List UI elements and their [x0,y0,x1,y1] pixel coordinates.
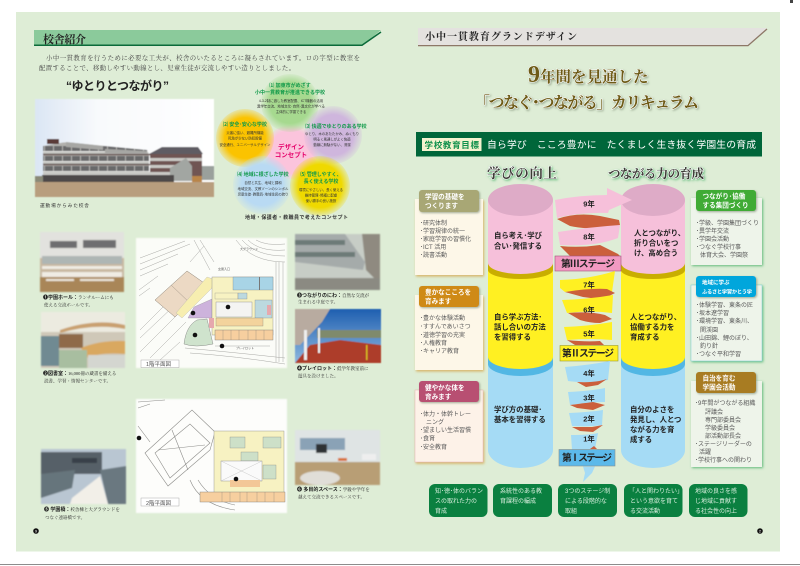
panel: 自治を育む学園会活動: 評議会 [705,408,723,416]
caption 2 [43,370,116,384]
right stage 1 goal: 自分のよさを [630,405,674,414]
6年 ribbon: 6年 [583,306,595,315]
panel: 自治を育む学園会活動: 専門部委員会 [705,416,741,424]
concept 1 text: 異学年交流、地域文化･自然･異文化が学べる [257,104,325,108]
stage 2 goal: 自ら学ぶ方法･ [494,312,542,322]
right stage 3 goal: け、高め合う [634,248,678,258]
caption 3: ❸つながりのにわ：自然な交流が [297,292,370,299]
stage 3 goal: 自ら考え･学び [494,231,542,240]
card: 知・徳・体のバランス: 知･徳･体のバラン [435,487,483,495]
panel: 学習の基礎をつくります: ･読書活動 [420,251,447,259]
panel: 地域に学ぶふるさと学習かとう学: ･体験学習、東条の匠 [696,301,753,309]
panel: 自治を育む学園会活動 [691,372,762,467]
concept 5 text: 環境にやさしい、長く使える [299,187,343,192]
page number left [33,528,39,534]
stage I box: 第Ⅰステージ [562,451,612,464]
panel: 地域に学ぶふるさと学習かとう学: ･環境学習、東条川、 [696,317,753,325]
9年 ribbon with arrow [555,188,632,229]
card: 3つのステージ制 [558,484,617,517]
floor plan: 2nd floor: 2階平面図 [146,499,172,507]
concept 4 text [237,171,289,196]
right stage 1 goal: ながる力を育 [630,425,674,434]
floor plan: 1st floor: 1階平面図 [146,360,172,368]
page number right [757,528,763,534]
caption 6: 越えて交流できるスペースです。 [298,494,365,500]
page number left: 9 [35,528,38,534]
5年 ribbon [564,322,612,345]
stage III box: 第Ⅲステージ [561,257,615,270]
column heading: つながる力の育成: つながる力の育成 [608,166,704,181]
card: 人と関わりたい: る交流活動 [630,507,660,515]
column heading: 学びの向上: 学びの向上 [487,165,558,181]
panel: 地域に学ぶふるさと学習かとう学: 関渓園 [700,326,718,334]
panel: 地域に学ぶふるさと学習かとう学: ふるさと学習かとう学 [702,288,752,296]
panel: 地域に学ぶふるさと学習かとう学: ･山田錦、鯉のぼり、 [696,334,753,342]
caption 1 [43,294,114,308]
card: 人と関わりたい: 「人と関わりたい」 [629,488,683,495]
8年 ribbon: 8年 [583,233,595,242]
stage 2 goal: を習得する [494,332,531,342]
caption 1: 使える交流ホールです。 [44,302,93,308]
panel: つながり・協働する集団づくり: 体育大会、学園祭 [700,251,748,259]
card: 3つのステージ制: 取組 [565,507,577,515]
stage II box: 第Ⅱステージ [562,347,614,360]
panel: 学習の基礎をつくります: つくります [425,201,458,210]
right stage 3 goal: 人とつながり、 [634,228,685,238]
band: 学校教育目標 [416,132,762,156]
concept 4 text: 自然と共生、地域と調和 [244,180,282,185]
caption 3 [297,292,370,306]
panel: つながり・協働する集団づくり: ･つなぐ学校行事 [696,243,741,251]
caption 4: ❹プレイロット：低学年教室前に [297,365,369,372]
7年 ribbon [560,271,615,298]
card: 系統性のある教育課程の編成: 育課程の編成 [500,497,536,505]
caption 5: つなぐ連絡橋です。 [45,514,85,521]
photo 4: プレイロット [295,309,381,363]
concept 2 text [220,121,271,147]
6年 ribbon [562,295,613,323]
panel: 健やかな体を育みます: ･望ましい生活習慣 [420,426,471,434]
7年 ribbon: 7年 [583,281,595,290]
concept 3 text: ゆとり、木のあたたかみ、ぬくもり [305,131,359,136]
card: 地域の良さを感じ: 地域の良さを感 [695,487,737,495]
photo 3: つながりのにわ [295,234,380,290]
panel: 学習の基礎をつくります: ･ICT 活用 [420,243,446,251]
card: 3つのステージ制: による段階的な [565,497,607,505]
panel: 学習の基礎をつくります: 学習の基礎を [425,192,465,201]
corner mark [790,0,793,3]
caption 4 [297,365,369,380]
center: デザインコンセプト [275,142,307,159]
panel: 豊かなこころを育みます [415,286,483,370]
panel: 健やかな体を育みます: 健やかな体を [425,383,465,392]
caption 4: 遊具を設けました。 [298,372,338,380]
2年 ribbon: 2年 [583,415,595,424]
4年 ribbon [565,361,610,387]
panel: 健やかな体を育みます [415,381,483,462]
floor plan: 1st floor [136,238,287,368]
panel: 豊かなこころを育みます: 育みます [425,296,452,306]
concept 3 text [305,123,367,147]
right stage 2 goal: 人とつながり、 [630,312,681,322]
9年 ribbon with arrow: 9年 [583,200,595,209]
main title [474,62,699,112]
concept caption: 地域・保護者・教職員で考えたコンセプト [245,214,348,221]
floor plan: 1st floor: プレイロット [236,345,254,350]
panel: 豊かなこころを育みます: 豊かなこころを [425,288,471,296]
intro text: 小中一貫教育を行うために必要な工夫が、校舎のいたるところに凝らされています。ロの字型に教室を [46,53,360,62]
card: 3つのステージ制: 3つのステージ制 [565,487,610,495]
concept 4 text: ⑷ 地域に根ざした学校 [237,171,289,178]
panel: 自治を育む学園会活動: 学園会活動 [702,382,736,392]
heading: 小中一貫教育グランドデザイン [418,28,767,46]
right stage 3 goal: 折り合いをつ [634,238,678,248]
card: 地域の良さを感じ [689,484,748,517]
panel: 豊かなこころを育みます: ･豊かな体験活動 [420,314,465,322]
photo caption: building: 運動場からみた校舎 [40,202,89,209]
band: 学校教育目標: 学校教育目標 [424,140,479,150]
concept 2 text: 死角が少ない防犯設備 [228,136,263,140]
stage I box [559,450,615,466]
photo 2: 図書室 [41,312,125,368]
photo 6: 多目的スペース [295,430,380,485]
panel: 学習の基礎をつくります: ･学習規律の統一 [420,227,465,235]
stage III box [555,256,621,271]
bottom edge line [0,564,800,565]
concept 1 text [255,82,325,114]
concept 1 text: 小中一貫教育が推進できる学校 [255,89,325,96]
panel: 豊かなこころを育みます: ･道徳学習の充実 [420,331,465,339]
floor plan: 1st floor: 大グラウンド [240,246,258,251]
card: 系統性のある教育課程の編成: 系統性のある教 [500,487,542,495]
caption 6: ❻ 多目的スペース：学級や学年を [297,486,370,493]
panel: 自治を育む学園会活動: 部活動部長会 [705,432,741,440]
main title: 「つなぐ･つながる」カリキュラム [474,94,699,112]
panel: 地域に学ぶふるさと学習かとう学: ･坂本遼学習 [696,309,729,317]
3年 ribbon [568,388,605,410]
panel: right page background [400,12,780,552]
panel: 健やかな体を育みます: ･安全教育 [420,443,447,451]
floor plan: 2nd floor [136,399,287,513]
heading: 校舎紹介: 校舎紹介 [43,32,86,46]
panel: 地域に学ぶふるさと学習かとう学: 地域に学ぶ [702,278,730,286]
floor plan: 1st floor: 玄関入口 [218,266,230,271]
center: デザインコンセプト: コンセプト [275,151,307,159]
intro text [39,53,360,72]
panel: 健やかな体を育みます: 育みます [425,392,452,401]
panel: 健やかな体を育みます: ニング [426,418,444,426]
concept 3 text: ⑶ 快適でゆとりのある学校 [305,123,367,130]
panel: つながり・協働する集団づくり: ･学級、学園集団づくり [696,219,759,227]
subtitle: ゆとりとつながり: “ゆとりとつながり” [66,78,169,93]
stage 1 goal: 基本を習得する [494,415,546,424]
2年 ribbon [569,410,603,432]
panel: 健やかな体を育みます: ･食育 [420,434,435,442]
stage 3 goal: 合い･発信する [494,242,542,250]
panel: つながり・協働する集団づくり: する集団づくり [702,200,749,210]
center: デザインコンセプト: デザイン [278,142,304,151]
right stage 2 goal: 協働する力を [630,322,674,332]
intro text: 配置することで、移動しやすい動線とし、児童生徒が交流しやすい造りとしました。 [39,63,295,72]
concept 3 text: 明るく風通しがよく快適 [313,136,351,142]
caption 2: ❷図書室：16,000冊の蔵書を備える [43,370,116,377]
diagram: design concept circles [216,74,367,216]
4年 ribbon: 4年 [583,369,595,378]
panel: 学習の基礎をつくります: ･家庭学習の習慣化 [420,235,471,243]
band: 学校教育目標: 自ら学び こころ豊かに たくましく生き抜く学園生の育成 [487,138,756,151]
photo: school building from the sports ground [35,99,214,197]
concept 5 text: 長く使える学校 [304,178,338,185]
main title: 9年間を見通した [528,62,649,88]
card: 知・徳・体のバランス: スの取れた力の [435,497,477,505]
caption 3: 生まれる中庭です。 [298,298,338,306]
card: 系統性のある教育課程の編成 [493,484,552,517]
panel: つながり・協働する集団づくり: ･異学年交流 [696,227,729,235]
panel: left page background [16,12,400,552]
caption 5 [44,506,120,521]
stage II box [560,346,618,361]
panel: 地域に学ぶふるさと学習かとう学 [691,276,762,361]
panel: 自治を育む学園会活動: ･ステージリーダーの [695,440,752,448]
concept 1 text: 4-3-2制に適した教室配置、ICT機器の活用 [259,98,323,103]
concept 2 text: 安全通行、ユニバーサルデザイン [220,142,271,147]
8年 ribbon [558,225,620,256]
card: 知・徳・体のバランス [429,484,488,517]
photo 5: 学園橋 [41,449,126,504]
concept 4 text: 児童生徒･教職員･地域住民の誇り [238,192,288,196]
concept 2 text: 災害に強い、避難所機能 [226,130,264,135]
panel: つながり・協働する集団づくり [691,190,762,265]
panel: 自治を育む学園会活動: 活躍 [699,448,711,456]
caption 2: 読書、学習・情報センターです。 [44,378,111,384]
1年 ribbon [571,433,598,450]
left cylinder [488,184,553,468]
stage 2 goal: 話し合いの方法 [494,322,546,332]
panel: 地域に学ぶふるさと学習かとう学: 釣り針 [700,342,718,350]
panel: 豊かなこころを育みます: ･すすんであいさつ [420,324,471,330]
concept 4 text: 地域交流、文教ゾーンのシンボル [238,186,289,191]
concept 1 text: ⑴ 加東市がめざす [269,82,311,89]
concept 3 text: 動線に無駄がない、清潔 [313,142,351,147]
card: 地域の良さを感じ: じ地域に貢献す [695,497,737,505]
panel: 学習の基礎をつくります: ･研究体制 [420,219,447,227]
panel: 豊かなこころを育みます: ･人権教育 [420,339,447,347]
concept 5 text: 維持管理･修繕に配慮 [305,192,338,198]
panel: つながり・協働する集団づくり: ･学園会活動 [696,235,729,243]
right stage 1 goal: 発見し、人とつ [630,415,681,424]
panel: 自治を育む学園会活動: 自治を育む [702,374,736,382]
right cylinder [621,184,685,468]
spiral ribbons with years [555,188,632,482]
1年 ribbon: 1年 [583,435,595,444]
caption 5: ❺ 学園橋：校舎棟と大グラウンドを [44,506,120,513]
caption 6 [297,486,370,500]
panel: 学習の基礎をつくります [415,190,483,275]
heading: 小中一貫教育グランドデザイン: 小中一貫教育グランドデザイン [425,30,577,43]
panel: 自治を育む学園会活動: ･9年間がつながる組織 [695,399,755,407]
concept 1 text: 主体的に学習できる [276,109,306,114]
3年 ribbon: 3年 [583,394,595,403]
panel: 地域に学ぶふるさと学習かとう学: ･つなぐ平和学習 [696,350,741,358]
ribbon tip [583,466,595,482]
card: 地域の良さを感じ: る社会性の向上 [695,507,737,515]
heading: 校舎紹介 [34,30,381,46]
stage 1 goal: 学び方の基礎･ [494,405,542,414]
concept 2 text: ⑵ 安全･安心な学校 [223,121,267,128]
card: 人と関わりたい [624,484,683,517]
panel: 自治を育む学園会活動: ･学校行事への関わり [695,456,752,464]
card: 人と関わりたい: という意欲を育て [630,497,678,505]
concept 5 text [299,171,343,203]
photo 1: 学園ホール [40,232,124,292]
panel: 健やかな体を育みます: ･体力・体幹トレー [420,410,471,418]
panel: 自治を育む学園会活動: 学級委員会 [705,424,735,432]
concept 5 text: ⑸ 管理しやすく、 [300,171,342,178]
page number right: 2 [759,528,762,534]
panel: つながり・協働する集団づくり: つながり･協働 [702,192,746,200]
right stage 2 goal: 育成する [630,332,660,342]
concept 5 text: 使い勝手の良い施設 [306,198,337,203]
card: 知・徳・体のバランス: 育成 [435,507,447,515]
panel: 豊かなこころを育みます: ･キャリア教育 [420,347,459,355]
right stage 1 goal: 成する [630,435,652,444]
caption 1: ❶学園ホール：ランチルームにも [43,294,114,301]
5年 ribbon: 5年 [583,330,595,339]
